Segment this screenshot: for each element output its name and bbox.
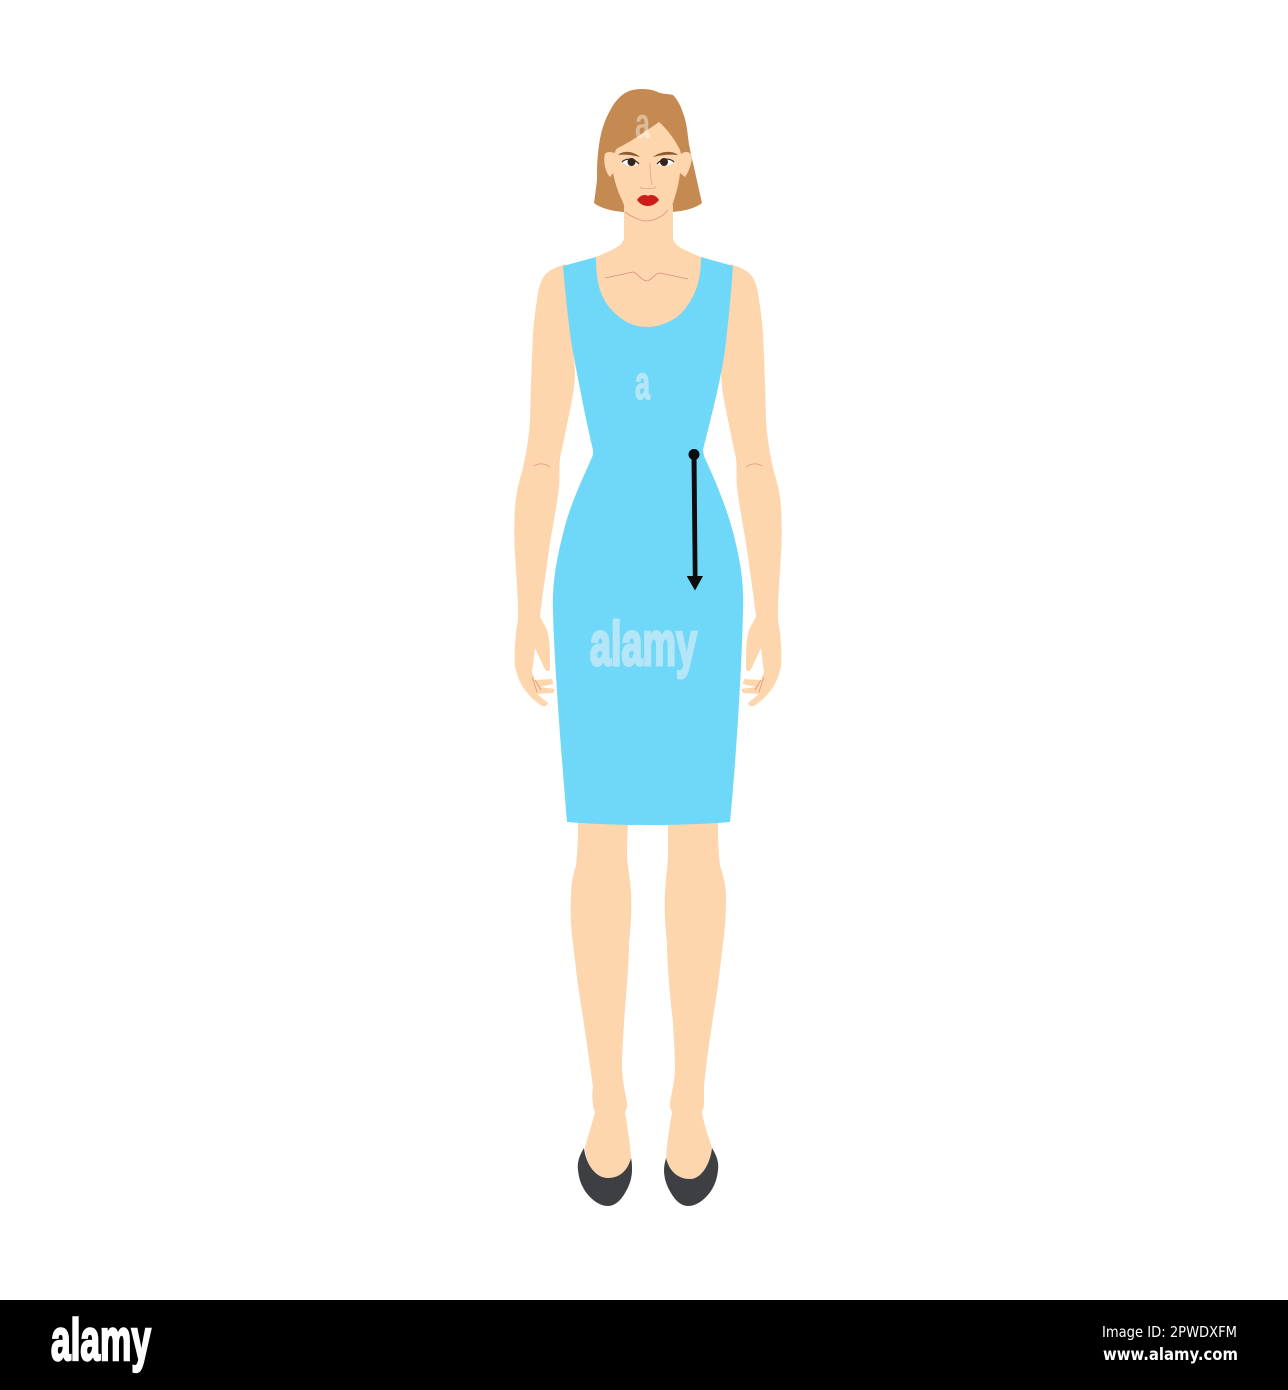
eyes [622, 158, 674, 166]
footer bar [0, 1300, 1288, 1390]
left arm [514, 264, 575, 706]
left leg and foot [571, 815, 631, 1178]
jaw line [625, 210, 668, 221]
image id: Image ID: 2PWDXFM [1102, 1323, 1237, 1341]
nose [640, 163, 656, 189]
collarbone line [605, 272, 688, 281]
right arm [721, 264, 782, 706]
right shoe [664, 1148, 718, 1206]
neck and chest [592, 205, 705, 335]
right leg and foot [665, 815, 726, 1179]
arrow: waist to hip measurement [687, 449, 703, 590]
dress [553, 257, 743, 825]
eyebrows [618, 152, 678, 157]
website: www.alamy.com [1103, 1345, 1238, 1365]
watermark: alamy on dress: alamy [590, 610, 697, 679]
hair [594, 89, 702, 212]
face and ears [604, 122, 692, 221]
footer logo: alamy [51, 1308, 151, 1373]
arm creases [532, 464, 764, 692]
watermark: small a on dress: a [635, 356, 650, 409]
left shoe [578, 1148, 632, 1206]
figure: woman in blue dress [514, 89, 782, 1206]
lips [637, 195, 659, 206]
watermark: a on forehead: a [635, 99, 650, 148]
